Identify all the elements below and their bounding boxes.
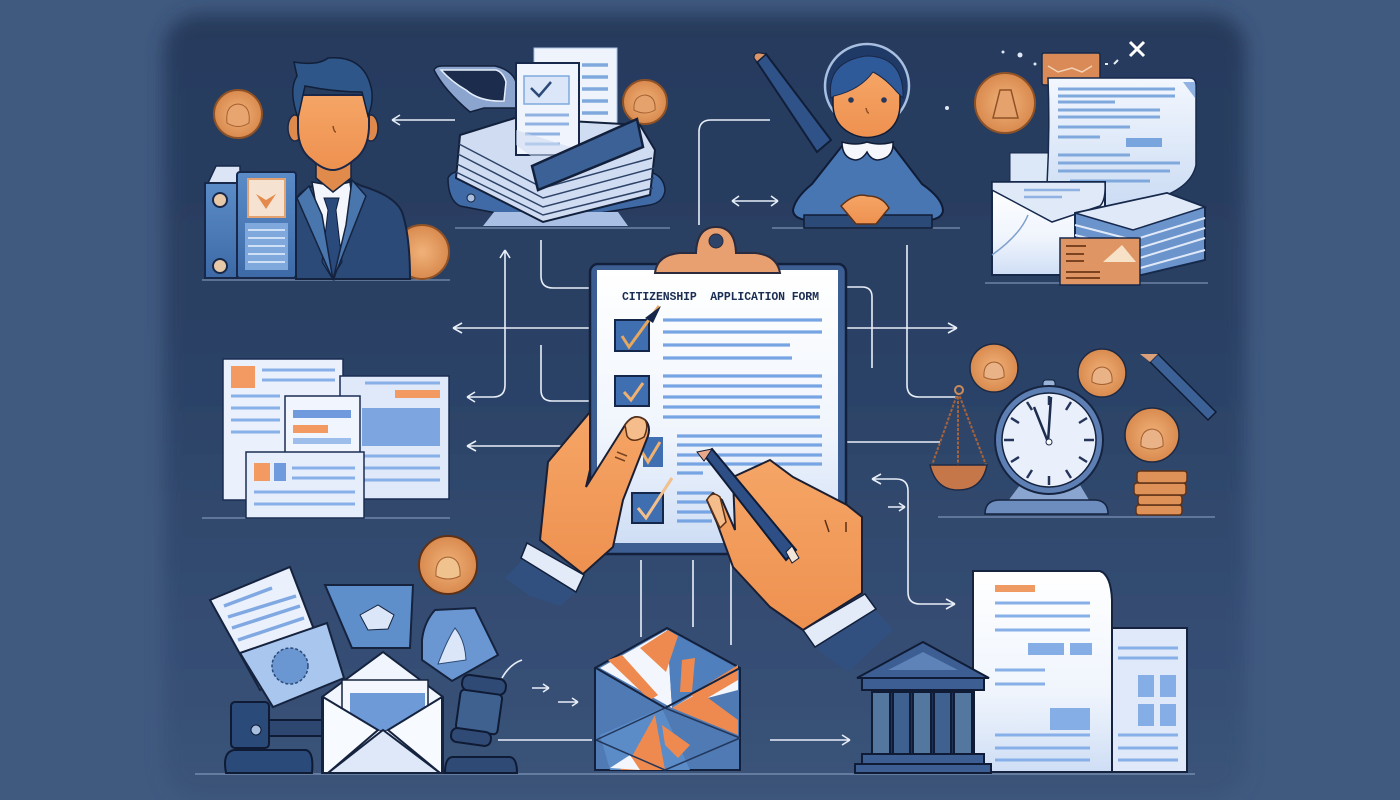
pen bbox=[697, 449, 799, 563]
coin behind shoulder bbox=[395, 225, 449, 279]
badge bbox=[325, 585, 413, 648]
binder bbox=[205, 166, 296, 278]
pages bbox=[456, 118, 655, 222]
cuff bbox=[521, 543, 584, 592]
card bbox=[240, 623, 344, 707]
icon: courthouse with documents bbox=[855, 571, 1187, 773]
left gavel bbox=[225, 702, 324, 773]
coin bbox=[419, 536, 477, 594]
envelope bbox=[322, 652, 443, 773]
body bbox=[793, 146, 943, 220]
icon: cards, seals, gavel and envelope bbox=[210, 536, 517, 773]
hair bbox=[293, 58, 372, 118]
form lines bbox=[663, 320, 822, 521]
cuff bbox=[803, 594, 876, 647]
icon: document stack with folder bbox=[434, 48, 667, 226]
desk bbox=[804, 215, 932, 228]
neck and face bbox=[833, 70, 900, 138]
icon: three documents with orange highlights bbox=[223, 359, 449, 518]
sleeve bbox=[816, 608, 893, 672]
palm and thumb bbox=[540, 412, 649, 574]
folder bbox=[532, 119, 643, 190]
blue base bbox=[448, 172, 665, 222]
connector lines and arrows bbox=[392, 115, 958, 745]
scale bbox=[932, 392, 986, 465]
collar bbox=[842, 142, 893, 160]
left hand holding clipboard bbox=[505, 412, 649, 606]
icon: scales, clock, coins and pen bbox=[930, 344, 1216, 515]
hands bbox=[841, 195, 889, 224]
face bbox=[298, 95, 369, 170]
clipboard paper bbox=[597, 270, 838, 543]
back note bbox=[1010, 153, 1052, 183]
orange note bbox=[1042, 53, 1100, 85]
icon: woman clerk at desk bbox=[754, 44, 943, 228]
pen bbox=[757, 54, 831, 152]
right hand writing with pen bbox=[697, 449, 893, 672]
fringe bbox=[830, 56, 903, 98]
checkboxes bbox=[615, 306, 672, 523]
main clipboard with form bbox=[590, 227, 846, 554]
form title: CITIZENSHIP APPLICATION FORM bbox=[622, 291, 819, 304]
clip bbox=[655, 227, 780, 273]
pen bbox=[1150, 354, 1216, 420]
coin bbox=[975, 73, 1035, 133]
hand bbox=[707, 460, 862, 630]
envelope bbox=[992, 182, 1105, 275]
hair bbox=[825, 44, 909, 128]
icon: envelope with union flag bbox=[595, 628, 740, 770]
neck bbox=[316, 160, 351, 192]
right gavel bbox=[445, 674, 517, 773]
icon: letters and envelopes with coin bbox=[945, 42, 1205, 285]
tag bbox=[422, 608, 498, 681]
ears bbox=[288, 115, 302, 141]
orange card bbox=[1060, 238, 1140, 285]
coin bbox=[214, 90, 262, 138]
front document bbox=[516, 63, 579, 155]
central dark panel bbox=[164, 14, 1246, 800]
ground lines bbox=[195, 228, 1215, 774]
icon: businessman with binder bbox=[205, 58, 449, 280]
coin stack bbox=[1134, 471, 1187, 515]
sleeve bbox=[505, 556, 578, 606]
suit bbox=[296, 176, 410, 279]
clock bbox=[1005, 485, 1092, 505]
document bbox=[210, 567, 318, 690]
letter bbox=[1047, 78, 1196, 225]
coins bbox=[970, 344, 1018, 392]
close mark bbox=[1130, 42, 1144, 56]
clipboard board bbox=[590, 264, 846, 554]
paper stack bbox=[1075, 193, 1205, 277]
